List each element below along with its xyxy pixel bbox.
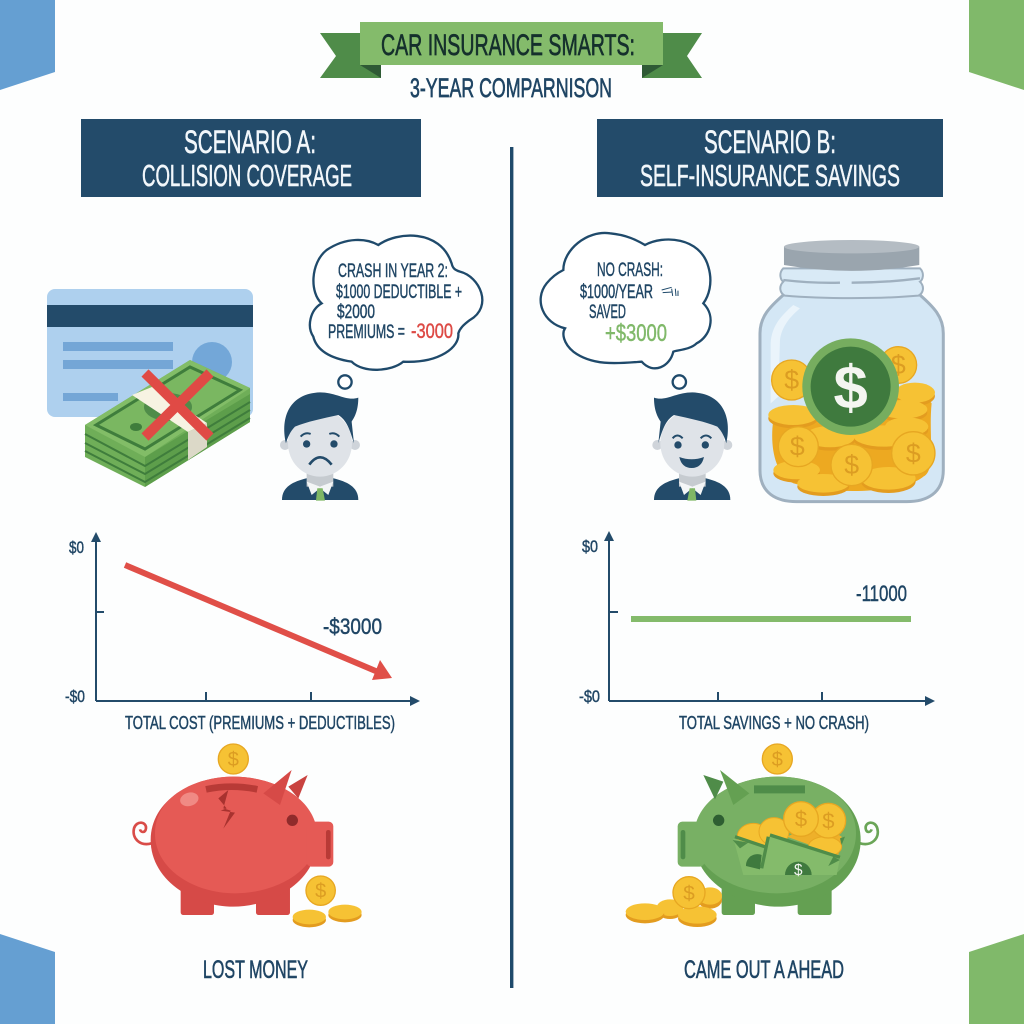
face-on coins: $ [844, 450, 859, 480]
thought bubble: scenario A: CRASH IN YEAR 2: [338, 261, 448, 282]
falling coin: $ [772, 749, 783, 771]
chart: scenario B: $0 [582, 537, 598, 556]
chart: scenario B [579, 531, 935, 733]
corner: top left [0, 0, 55, 90]
icon: broken red piggy bank [134, 744, 362, 927]
dollar badge [802, 338, 899, 435]
heading: scenario A: SCENARIO A: [184, 124, 316, 160]
thought bubble: scenario B: SAVED [589, 302, 626, 323]
trend arrow [125, 565, 392, 680]
thought bubble: scenario A [310, 236, 482, 389]
coin pile: $ [683, 882, 695, 905]
heading: scenario A: COLLISION COVERAGE [142, 158, 352, 193]
face-on coins: $ [784, 365, 799, 395]
chart: scenario B: -11000 [856, 581, 907, 606]
stacked coins [768, 383, 935, 496]
chart: scenario B: TOTAL SAVINGS + NO CRASH) [679, 713, 869, 733]
heading: scenario B [597, 119, 943, 197]
face-on coins: $ [790, 432, 805, 462]
thought bubble: scenario A: $2000 [337, 302, 375, 323]
icon: green piggy bank full of coins [626, 744, 878, 927]
title banner: CAR INSURANCE SMARTS: [381, 29, 635, 62]
face-on coins: $ [906, 438, 921, 468]
face-on coins: $ [891, 350, 906, 380]
face-on coins [772, 347, 935, 486]
chart: scenario A: -$0 [65, 687, 85, 706]
chart: scenario A: -$3000 [323, 614, 382, 639]
title banner [320, 22, 702, 78]
chart: scenario B: -$0 [579, 687, 600, 706]
jar neck [780, 268, 923, 298]
thought bubble: scenario A: -3000 [411, 320, 453, 343]
jar lid [784, 240, 919, 271]
heading: scenario A [81, 119, 421, 197]
label: came out ahead: CAME OUT A AHEAD [684, 956, 844, 984]
savings line [631, 616, 911, 622]
corner: bottom right [969, 934, 1024, 1024]
icon: broken red piggy bank: $ [228, 749, 239, 771]
thought bubble: scenario B: NO CRASH: [597, 260, 663, 281]
icon: broken red piggy bank: $ [315, 881, 326, 903]
pig window with money: $ [795, 807, 807, 832]
falling coin [762, 744, 792, 774]
icon: insurance card [47, 289, 253, 417]
corner: top right [969, 0, 1024, 90]
corner: bottom left [0, 934, 55, 1024]
icon: jar of coins [760, 240, 943, 502]
icon: worried man [280, 392, 360, 501]
pig window with money: $ [822, 808, 834, 833]
coin pile [626, 877, 722, 927]
icon: happy man [652, 392, 732, 501]
pig window with money: $ [794, 862, 803, 879]
thought bubble: scenario B [541, 233, 711, 389]
heading: scenario B: SCENARIO B: [704, 124, 836, 160]
thought bubble: scenario B: $1000/YEAR [580, 282, 653, 303]
subtitle: 3-YEAR COMPARNISON [410, 73, 612, 103]
icon: crossed-out cash stack [85, 360, 250, 487]
chart: scenario A [65, 532, 420, 733]
chart: scenario A: TOTAL COST (PREMIUMS + DEDUCTIBLES) [125, 713, 395, 733]
chart: scenario A: $0 [69, 538, 84, 557]
label: lost money: LOST MONEY [203, 956, 308, 984]
center divider [510, 147, 513, 988]
thought bubble: scenario A: PREMIUMS = [328, 322, 405, 343]
thought bubble: scenario B: +$3000 [605, 320, 667, 347]
jar glass [760, 295, 943, 502]
dollar badge: $ [833, 353, 868, 422]
pig window with money [733, 802, 846, 879]
thought bubble: scenario A: $1000 DEDUCTIBLE + [336, 282, 462, 303]
